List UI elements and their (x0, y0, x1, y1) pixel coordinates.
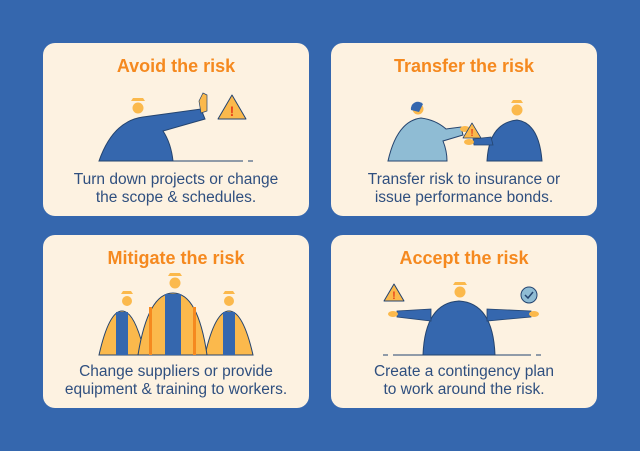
text: avoid: Turn down projects or change (74, 171, 278, 188)
heading: avoid: Avoid the risk (117, 56, 235, 76)
text: avoid: the scope & schedules. (96, 189, 256, 206)
panel: mitigate (43, 235, 309, 408)
illustration: mitigate (98, 273, 254, 356)
panel: transfer (331, 43, 597, 216)
heading: accept: Accept the risk (399, 248, 529, 268)
text: accept: Create a contingency plan (374, 363, 554, 380)
text: avoid (74, 171, 278, 206)
text: transfer: Transfer risk to insurance or (368, 171, 560, 188)
illustration: avoid (98, 92, 253, 162)
illustration: accept (383, 282, 541, 356)
heading: transfer: Transfer the risk (394, 56, 534, 76)
illustration: avoid: ! (230, 103, 234, 119)
text: mitigate: equipment & training to workers. (65, 381, 287, 398)
text: mitigate (65, 363, 287, 398)
text: accept: to work around the risk. (383, 381, 545, 398)
text: accept (374, 363, 554, 398)
panel: accept (331, 235, 597, 408)
panel: avoid (43, 43, 309, 216)
illustration: transfer (387, 100, 542, 162)
text: transfer (368, 171, 560, 206)
illustration: accept: ! (392, 290, 396, 302)
heading: mitigate: Mitigate the risk (107, 248, 245, 268)
text: transfer: issue performance bonds. (375, 189, 553, 206)
text: mitigate: Change suppliers or provide (79, 363, 273, 380)
illustration: transfer: ! (470, 128, 474, 139)
